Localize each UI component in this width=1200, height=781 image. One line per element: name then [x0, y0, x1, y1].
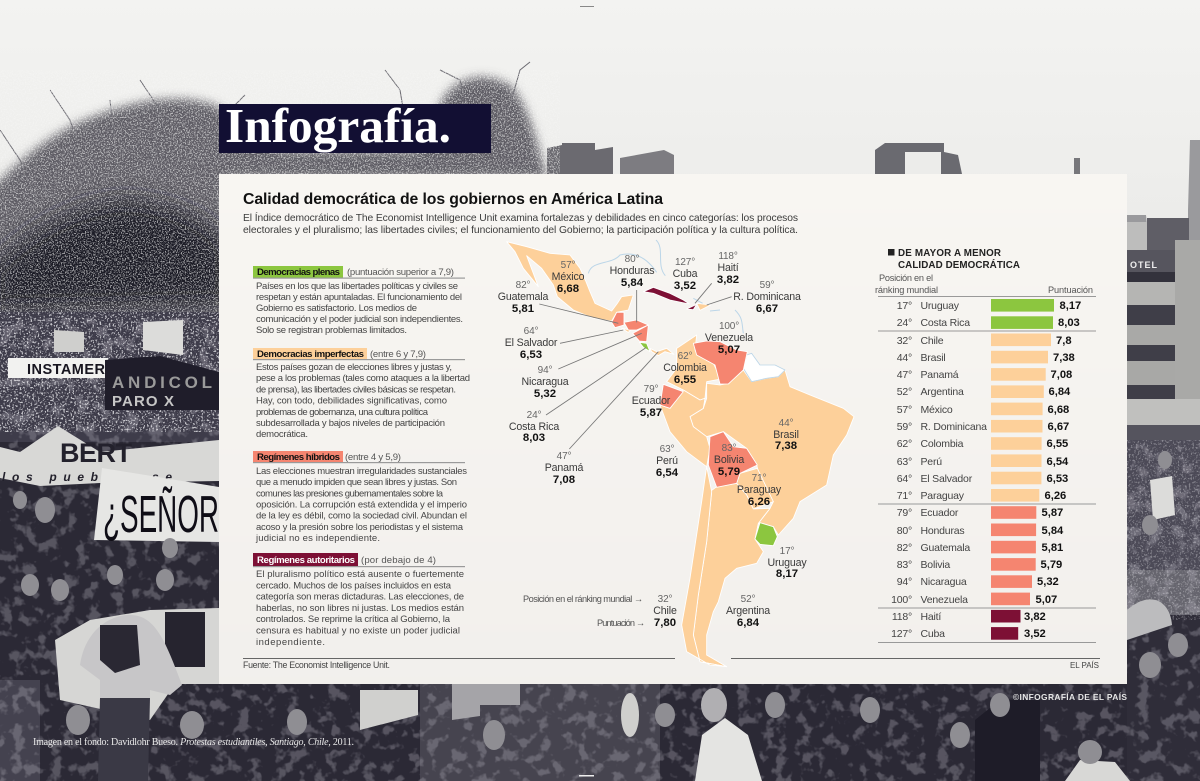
- ranking heading: CALIDAD DEMOCRÁTICA: [898, 259, 1020, 271]
- label: Nicaragua: 5,32: [534, 388, 556, 400]
- background: under-panel tone: [219, 174, 1127, 684]
- row: Perú: 6,54: [1046, 456, 1069, 468]
- row: R. Dominicana: 6,67: [1048, 421, 1069, 433]
- legend: democracias imperfectas: Democracias imperfectas: [257, 349, 364, 360]
- label: Cuba: [673, 257, 698, 292]
- label: Honduras: [610, 254, 654, 289]
- background: tree branches: [0, 62, 530, 210]
- row: Guatemala: 82°: [897, 542, 912, 554]
- map: green countries: [639, 342, 777, 546]
- row: Colombia: Colombia: [920, 438, 964, 450]
- row: Honduras: 80°: [897, 525, 912, 537]
- label: Paraguay: Paraguay: [737, 484, 782, 496]
- legend: regímenes híbridos: judicial no es independiente.: [255, 533, 380, 544]
- row: Uruguay: 17°: [897, 300, 912, 312]
- row: México: 6,68: [1048, 404, 1069, 416]
- label: Brasil: 7,38: [775, 440, 797, 452]
- label: Paraguay: 71°: [752, 473, 766, 484]
- row: Costa Rica: 8,03: [1058, 317, 1080, 329]
- label: México: 57°: [561, 260, 575, 271]
- legend: regímenes híbridos: de la ley es débil, como la sociedad civil. Abundan el: [256, 511, 467, 522]
- label: Honduras: 5,84: [621, 277, 644, 289]
- title: Calidad democrática de los gobiernos en América Latina: [243, 191, 663, 208]
- label: Chile with key: Posición en el ránking mundial →: [523, 594, 643, 604]
- ranking heading: [888, 248, 1020, 271]
- label: Costa Rica: 8,03: [523, 432, 545, 444]
- row: Colombia: [897, 437, 1068, 450]
- label: Paraguay: 6,26: [748, 496, 770, 508]
- label: Perú: 63°: [660, 444, 674, 455]
- row: R. Dominicana: [897, 420, 1069, 433]
- background: marchers: [13, 451, 1188, 781]
- background: protest banners: los pueblos se: [2, 470, 172, 484]
- row: El Salvador: 6,53: [1046, 473, 1068, 485]
- row: Argentina: [897, 385, 1071, 398]
- background: protest banners: INSTAMER: [27, 362, 106, 378]
- row: Haití: [892, 610, 1046, 623]
- label: Panamá: 7,08: [553, 474, 575, 486]
- headline: Infografía: Infografía.: [225, 98, 451, 153]
- row: Chile: 32°: [897, 335, 912, 347]
- row: Argentina: 52°: [897, 386, 912, 398]
- row: Nicaragua: 5,32: [1037, 576, 1059, 588]
- background: protest banners: [0, 320, 219, 720]
- label: Honduras: Honduras: [610, 265, 654, 277]
- label: Panamá: Panamá: [545, 462, 584, 474]
- label: R. Dominicana: 6,67: [756, 303, 778, 315]
- label: Brasil: 44°: [779, 418, 793, 429]
- label: Venezuela: [705, 321, 753, 356]
- row: Argentina: Argentina: [920, 386, 964, 398]
- row: Perú: [897, 454, 1069, 468]
- label: Honduras: 80°: [625, 254, 639, 265]
- legend: democracias plenas: [253, 266, 465, 336]
- background: protest banners: ANDICOL: [112, 373, 212, 392]
- label: Brasil: [773, 418, 799, 452]
- row: Perú: Perú: [920, 456, 942, 468]
- background: protest banners: BERT: [60, 438, 132, 468]
- label: El Salvador: [505, 326, 558, 361]
- label: Costa Rica: 24°: [527, 410, 541, 421]
- label: Costa Rica: Costa Rica: [509, 421, 559, 433]
- label: Panamá: [545, 451, 584, 486]
- chart separators: [878, 296, 1096, 643]
- legend: democracias plenas: Países en los que las libertades políticas y civiles se: [256, 281, 458, 292]
- row: Panamá: [897, 368, 1072, 381]
- row: Venezuela: [891, 593, 1057, 606]
- row: Paraguay: Paraguay: [920, 490, 965, 502]
- label: El Salvador: 64°: [524, 326, 538, 337]
- label: Venezuela: 5,07: [718, 344, 740, 356]
- map: orange countries: [507, 242, 854, 667]
- background: protest banners: ¿SEÑOR: [103, 486, 219, 544]
- row: Uruguay: [897, 299, 1081, 312]
- row: Nicaragua: Nicaragua: [920, 576, 967, 588]
- label: El Salvador: El Salvador: [505, 337, 558, 349]
- label: Haití: [717, 251, 739, 286]
- label: Bolivia: Bolivia: [714, 454, 744, 466]
- label: Guatemala: 5,81: [512, 303, 535, 315]
- map: maroon countries: [643, 287, 697, 310]
- label: Chile with key: 7,80: [654, 617, 676, 629]
- row: Honduras: 5,84: [1042, 525, 1064, 537]
- row: Nicaragua: 94°: [897, 576, 912, 588]
- row: Venezuela: 100°: [891, 594, 912, 606]
- ranking heading: DE MAYOR A MENOR: [898, 248, 1001, 259]
- legend: regímenes autoritarios: independiente.: [256, 637, 325, 648]
- map: leader lines: [539, 283, 732, 449]
- legend: democracias plenas: Democracias plenas: [257, 267, 340, 278]
- row: Venezuela: 5,07: [1036, 594, 1057, 606]
- label: Argentina: [726, 594, 770, 629]
- legend: regímenes autoritarios: [253, 553, 465, 648]
- row: Colombia: 6,55: [1046, 438, 1068, 450]
- label: Uruguay: Uruguay: [768, 557, 807, 569]
- legend: regímenes híbridos: acoso y la presión sobre los periodistas y el sistema: [256, 522, 464, 533]
- intro text: electorales y el pluralismo; las libertades civiles; el funcionamiento del Gobierno; la participación política y la cultura política.: [243, 225, 798, 236]
- credit: El País: EL PAÍS: [1070, 661, 1099, 670]
- legend: democracias imperfectas: Hay, con todo, debilidades significativas, como: [256, 396, 447, 407]
- row: Chile: 7,8: [1056, 335, 1072, 347]
- background: buildings skyline: OTEL: [1130, 260, 1158, 270]
- ranking column headers: Posición en el: [879, 273, 933, 283]
- label: Guatemala: 82°: [516, 280, 530, 291]
- legend: democracias imperfectas: de prensa), las libertades civiles básicas se respetan.: [256, 384, 456, 395]
- label: Perú: [656, 444, 679, 479]
- map labels: [498, 251, 807, 629]
- legend: regímenes autoritarios: categoría son meras dictaduras. Las elecciones, de: [256, 592, 464, 603]
- row: Costa Rica: Costa Rica: [920, 317, 970, 329]
- legend: regímenes autoritarios: censura es habitual y no existe un poder judicial: [256, 626, 460, 636]
- row: Bolivia: Bolivia: [920, 559, 950, 571]
- ranking column headers: ránking mundial: [875, 285, 938, 295]
- legend: regímenes híbridos: oposición. La corrupción está extendida y el imperio: [256, 500, 467, 510]
- label: Cuba: Cuba: [673, 268, 698, 280]
- infographic credit: ©INFOGRAFÍA DE EL PAÍS: [1013, 691, 1127, 702]
- row: El Salvador: 64°: [897, 473, 912, 485]
- map: white Guianas: [743, 353, 785, 382]
- row: R. Dominicana: R. Dominicana: [920, 421, 987, 433]
- label: Guatemala: [498, 280, 548, 315]
- label: Costa Rica: [509, 410, 559, 444]
- label: Chile with key: Chile: [653, 605, 677, 617]
- label: Colombia: 62°: [678, 351, 692, 362]
- panel: main card: [219, 174, 1127, 684]
- label: Haití: Haití: [717, 262, 739, 274]
- label: Paraguay: [737, 473, 782, 508]
- row: El Salvador: El Salvador: [920, 473, 973, 485]
- label: Cuba: 127°: [675, 257, 695, 268]
- legend: democracias imperfectas: problemas de gobernanza, una cultura política: [256, 407, 429, 418]
- legend: democracias imperfectas: Estos países gozan de elecciones libres y justas y,: [256, 362, 452, 373]
- row: Haití: Haití: [920, 611, 941, 623]
- legend: regímenes híbridos: Regímenes híbridos: [257, 452, 340, 463]
- row: Venezuela: Venezuela: [920, 594, 968, 606]
- row: Cuba: 127°: [891, 628, 912, 640]
- legend: democracias plenas: (puntuación superior a 7,9): [347, 267, 454, 278]
- label: Bolivia: 5,79: [718, 466, 740, 478]
- row: Guatemala: [897, 541, 1063, 554]
- label: Chile with key: Puntuación →: [597, 618, 645, 628]
- row: Honduras: Honduras: [920, 525, 964, 537]
- legend: regímenes autoritarios: haberlas, no son libres ni justas. Los medios están: [256, 603, 464, 614]
- crop ticks: [579, 6, 594, 776]
- row: Nicaragua: [897, 575, 1059, 588]
- row: México: México: [920, 404, 953, 416]
- label: Panamá: 47°: [557, 451, 571, 462]
- label: México: 6,68: [557, 283, 579, 295]
- label: México: México: [552, 271, 585, 283]
- label: Chile with key: [523, 594, 677, 629]
- row: Haití: 3,82: [1024, 611, 1046, 623]
- row: México: 57°: [897, 404, 912, 416]
- legend: regímenes híbridos: (entre 4 y 5,9): [345, 452, 401, 463]
- map: sea coast outlines: [588, 240, 743, 333]
- label: Colombia: 6,55: [674, 374, 697, 386]
- label: Uruguay: 17°: [780, 546, 794, 557]
- legend: regímenes autoritarios: controlados. Se reprime la crítica al Gobierno, la: [256, 614, 451, 625]
- label: Colombia: Colombia: [663, 362, 707, 374]
- label: Haití: 118°: [718, 251, 738, 262]
- label: R. Dominicana: 59°: [760, 280, 774, 291]
- label: Ecuador: 79°: [644, 384, 658, 395]
- row: R. Dominicana: 59°: [897, 421, 912, 433]
- legend: democracias plenas: respetan y están apuntaladas. El funcionamiento del: [256, 292, 462, 303]
- row: Brasil: 7,38: [1053, 352, 1075, 364]
- row: Panamá: 7,08: [1050, 369, 1072, 381]
- row: Paraguay: [897, 489, 1066, 502]
- label: Bolivia: [714, 443, 744, 478]
- legend: democracias imperfectas: democrática.: [256, 429, 308, 440]
- legend: regímenes autoritarios: cercado. Muchos de los países incluidos en esta: [256, 580, 452, 591]
- row: Guatemala: 5,81: [1042, 542, 1063, 554]
- ranking column headers: Puntuación: [1048, 285, 1093, 295]
- row: Chile: Chile: [920, 335, 944, 347]
- background: trees: [0, 77, 548, 340]
- legend: democracias plenas: comunicación y el poder judicial son independientes.: [256, 314, 463, 325]
- label: Ecuador: Ecuador: [632, 395, 671, 407]
- label: Colombia: [663, 351, 707, 386]
- row: Perú: 63°: [897, 456, 912, 468]
- row: Ecuador: 79°: [897, 507, 912, 519]
- label: Ecuador: 5,87: [640, 407, 662, 419]
- label: Uruguay: 8,17: [776, 568, 798, 580]
- map: Latin America: [507, 240, 854, 667]
- row: Cuba: 3,52: [1024, 628, 1046, 640]
- label: Nicaragua: Nicaragua: [522, 376, 569, 388]
- label: Uruguay: [768, 546, 807, 580]
- row: Ecuador: 5,87: [1042, 507, 1063, 519]
- row: Paraguay: 6,26: [1044, 490, 1066, 502]
- legend: regímenes híbridos: Las elecciones muestran irregularidades sustanciales: [256, 466, 467, 477]
- intro text: [243, 211, 798, 236]
- legend: regímenes híbridos: comunes las presiones gubernamentales sobre la: [256, 488, 444, 499]
- row: Haití: 118°: [892, 611, 912, 623]
- label: R. Dominicana: [733, 280, 801, 315]
- legend: regímenes híbridos: que a menudo impiden que sean libres y justas. Son: [256, 477, 457, 488]
- row: Uruguay: Uruguay: [920, 300, 960, 312]
- legend: democracias imperfectas: (entre 6 y 7,9): [370, 349, 426, 360]
- map: red countries: [612, 312, 757, 487]
- label: Perú: Perú: [656, 455, 678, 467]
- row: México: [897, 403, 1069, 416]
- background: protest banners: PARO X: [112, 393, 174, 410]
- label: Venezuela: Venezuela: [705, 332, 753, 344]
- row: Uruguay: 8,17: [1060, 300, 1081, 312]
- label: Nicaragua: 94°: [538, 365, 552, 376]
- label: Guatemala: Guatemala: [498, 291, 548, 303]
- background: buildings skyline: [547, 140, 1200, 480]
- legend: regímenes autoritarios: (por debajo de 4): [361, 555, 436, 566]
- row: El Salvador: [897, 472, 1068, 485]
- legend: democracias plenas: Solo se registran problemas limitados.: [256, 325, 407, 336]
- row: Cuba: [891, 627, 1046, 640]
- label: Nicaragua: [522, 365, 569, 400]
- label: Cuba: 3,52: [674, 280, 696, 292]
- row: Panamá: 47°: [897, 369, 912, 381]
- row: Ecuador: [897, 506, 1063, 519]
- legend: democracias imperfectas: pese a los problemas (tales como ataques a la libertad: [256, 373, 470, 384]
- label: Argentina: 52°: [741, 594, 755, 605]
- legend: regímenes autoritarios: El pluralismo político está ausente o fuertemente: [256, 569, 464, 580]
- footer rules: [243, 658, 1100, 659]
- photo credit: Imagen en el fondo: Davidlohr Bueso. Protestas estudiantiles, Santiago, Chile, 2011.: [33, 737, 354, 748]
- label: Brasil: Brasil: [773, 429, 799, 441]
- ranking bar chart: [878, 296, 1096, 643]
- ranking column headers: [875, 273, 1093, 295]
- row: Colombia: 62°: [897, 438, 912, 450]
- row: Ecuador: Ecuador: [920, 507, 959, 519]
- row: Brasil: [897, 351, 1075, 364]
- legend: democracias imperfectas: [253, 348, 470, 440]
- row: Brasil: Brasil: [920, 352, 946, 364]
- row: Bolivia: 5,79: [1040, 559, 1062, 571]
- source note: Fuente: The Economist Intelligence Unit.: [243, 660, 390, 670]
- label: Chile with key: 32°: [658, 594, 672, 605]
- row: Costa Rica: 24°: [897, 317, 912, 329]
- row: Chile: [897, 334, 1072, 347]
- row: Bolivia: [897, 558, 1062, 571]
- label: Argentina: Argentina: [726, 605, 770, 617]
- row: Costa Rica: [897, 316, 1080, 329]
- row: Brasil: 44°: [897, 352, 912, 364]
- row: Bolivia: 83°: [897, 559, 912, 571]
- label: R. Dominicana: R. Dominicana: [733, 291, 801, 303]
- legend: democracias imperfectas: subdesarrollada y bajos niveles de participación: [256, 418, 445, 429]
- legend: regímenes híbridos: [253, 451, 467, 544]
- background: crowd: [0, 312, 1200, 781]
- row: Paraguay: 71°: [897, 490, 912, 502]
- label: Ecuador: [632, 384, 671, 419]
- label: El Salvador: 6,53: [520, 349, 542, 361]
- row: Argentina: 6,84: [1048, 386, 1071, 398]
- row: Guatemala: Guatemala: [920, 542, 970, 554]
- label: Haití: 3,82: [717, 274, 739, 286]
- background: dark tree mass: [0, 200, 230, 310]
- label: Argentina: 6,84: [737, 617, 760, 629]
- background: tree foliage texture: [0, 70, 560, 320]
- label: Bolivia: 83°: [722, 443, 736, 454]
- label: Perú: 6,54: [656, 467, 679, 479]
- intro text: El Índice democrático de The Economist Intelligence Unit examina fortalezas y debilidades en cinco categorías: los procesos: [243, 211, 798, 224]
- legend: regímenes autoritarios: Regímenes autoritarios: [257, 555, 355, 566]
- legend: democracias plenas: Gobierno es satisfactorio. Los medios de: [256, 303, 417, 314]
- row: Cuba: Cuba: [920, 628, 945, 640]
- label: Venezuela: 100°: [719, 321, 739, 332]
- row: Honduras: [897, 524, 1064, 537]
- row: Panamá: Panamá: [920, 369, 959, 381]
- label: México: [552, 260, 585, 295]
